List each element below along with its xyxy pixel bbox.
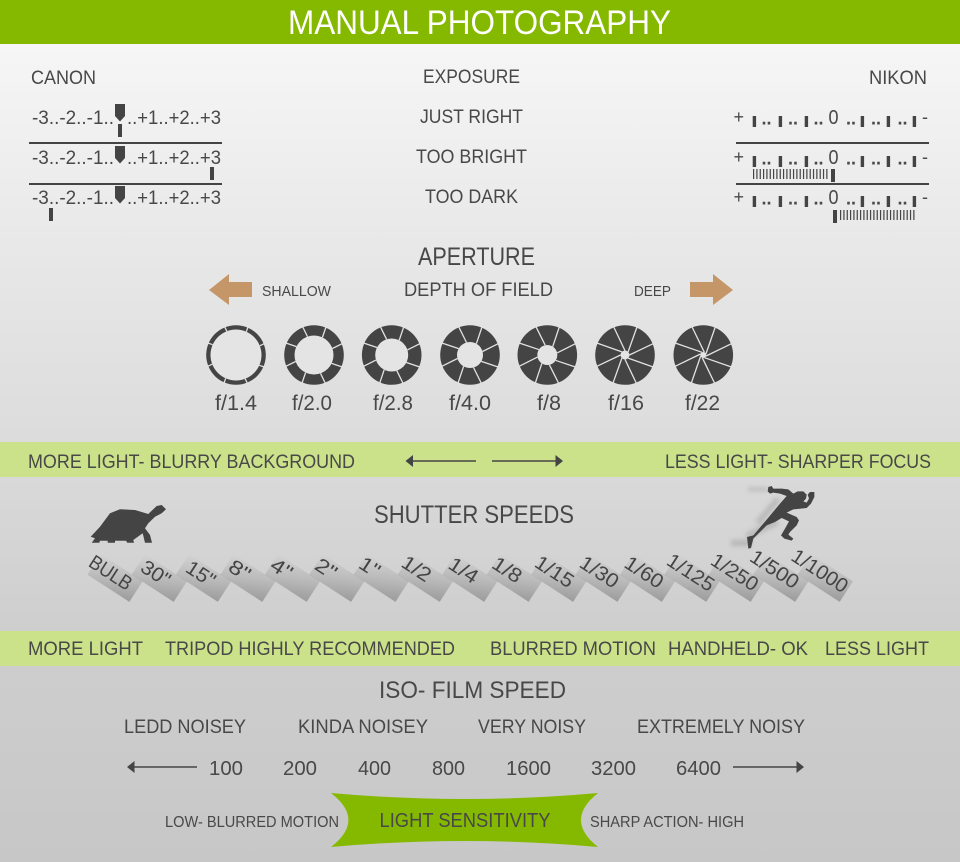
nikon meter: too bright: .. [788, 148, 798, 168]
icon: tortoise [91, 505, 166, 543]
label: deep: DEEP [634, 283, 671, 300]
canon meter: just right [32, 104, 221, 137]
shutter tag: 4 seconds [265, 554, 320, 602]
icon: aperture f/22 [674, 325, 733, 385]
shutter tag: 30 seconds: 30" [136, 556, 174, 592]
heading: aperture: APERTURE [418, 243, 535, 271]
icon: aperture f/1.4 [206, 325, 266, 385]
noise labels: LEDD NOISEY [124, 717, 246, 738]
f-stop labels: f/8 [537, 392, 561, 415]
text: more light: MORE LIGHT [28, 639, 143, 660]
label: low blurred motion: LOW- BLURRED MOTION [165, 814, 339, 831]
f-stop labels [215, 392, 720, 415]
noise labels: VERY NOISY [478, 717, 586, 738]
arrow: shallow [209, 274, 252, 305]
shutter tag: 1/125: 1/125 [663, 550, 718, 596]
f-stop labels: f/4.0 [449, 392, 491, 415]
ribbon: light sensitivity: LIGHT SENSITIVITY [380, 810, 550, 832]
arrow: right [492, 455, 563, 467]
text: less light: LESS LIGHT- SHARPER FOCUS [665, 452, 931, 473]
iso values: 1600 [506, 758, 551, 780]
nikon meter: too bright: .. [871, 148, 881, 168]
nikon meter: just right: .. [897, 108, 908, 128]
shutter tag: 15 seconds [176, 554, 231, 602]
nikon meter: just right: .. [871, 108, 881, 128]
nikon meter: too bright: + [733, 147, 744, 167]
arrow: deep [690, 274, 733, 305]
nikon meter: just right: + [733, 107, 744, 127]
iso values: 100 [209, 758, 243, 780]
f-stop labels: f/2.8 [373, 392, 413, 415]
title banner: MANUAL PHOTOGRAPHY [288, 4, 671, 42]
icon: aperture f/8 [518, 325, 577, 385]
shutter tag: 8 seconds: 8" [224, 556, 255, 586]
heading: canon: CANON [31, 68, 96, 89]
shutter tag: 1/4 [442, 553, 498, 602]
heading: exposure: EXPOSURE [423, 67, 520, 88]
text: less light: LESS LIGHT [825, 639, 929, 660]
noise labels: KINDA NOISEY [298, 717, 428, 738]
icon: aperture f/4.0 [440, 325, 500, 385]
shutter tag: 1/250: 1/250 [707, 549, 762, 596]
nikon meter: too bright: 0 [828, 147, 838, 169]
label: depth of field: DEPTH OF FIELD [404, 280, 553, 301]
nikon meter: too dark: 0 [828, 187, 838, 209]
canon meter: too bright [32, 146, 221, 180]
nikon meter: too dark: .. [761, 188, 772, 208]
shutter tag: 1/2 [395, 552, 454, 602]
nikon meter: too bright: .. [897, 148, 908, 168]
f-stop labels: f/1.4 [215, 392, 257, 415]
label: too dark: TOO DARK [425, 187, 518, 208]
shutter tag: 2 seconds [309, 554, 364, 602]
label: just right: JUST RIGHT [420, 107, 523, 128]
nikon meter: too bright [733, 147, 928, 182]
f-stop labels: f/16 [608, 392, 644, 415]
panel: iso [124, 677, 805, 847]
noise labels [124, 717, 805, 738]
nikon meter: too bright: - [922, 147, 928, 167]
nikon meter: too dark: .. [813, 188, 824, 208]
band: light and focus [0, 442, 960, 477]
shutter tag: 4 seconds: 4" [266, 554, 297, 585]
shutter tag: 1 second: 1" [355, 553, 384, 583]
canon meter: too dark: ..+1..+2..+3 [127, 188, 221, 209]
nikon meter: too bright: .. [761, 148, 772, 168]
icon: aperture f/2.8 [362, 325, 422, 385]
shutter tag: 1 second [353, 553, 409, 602]
nikon meter: too dark: .. [846, 188, 856, 208]
nikon meter: too bright: .. [813, 148, 824, 168]
panel: shutter speeds [83, 486, 854, 602]
icon: aperture f/16 [595, 325, 655, 385]
shutter tag: 1/60: 1/60 [620, 552, 667, 593]
canon meter: too dark [32, 186, 221, 221]
label: shallow: SHALLOW [262, 283, 332, 300]
nikon meter: too dark: .. [897, 188, 908, 208]
ribbon: light sensitivity [331, 793, 598, 847]
heading: iso film speed: ISO- FILM SPEED [379, 677, 566, 704]
f-stop labels: f/22 [685, 392, 720, 415]
f-stop labels: f/2.0 [292, 392, 332, 415]
iso values [209, 758, 721, 780]
text: more light: MORE LIGHT- BLURRY BACKGROUND [28, 452, 355, 473]
text: handheld: HANDHELD- OK [668, 639, 808, 660]
nikon meter: just right: .. [846, 108, 856, 128]
text: blurred motion: BLURRED MOTION [490, 639, 656, 660]
shutter tag: 8 seconds [220, 554, 276, 602]
canon meter: just right: ..+1..+2..+3 [127, 108, 221, 129]
panel: exposure [29, 67, 929, 223]
nikon meter: just right [733, 107, 928, 129]
canon meter: too dark: -3..-2..-1.. [32, 188, 114, 209]
label: too bright: TOO BRIGHT [416, 147, 527, 168]
nikon meter: just right: 0 [828, 107, 838, 129]
shutter tag: 1/30: 1/30 [575, 552, 623, 593]
nikon meter: too bright: .. [846, 148, 856, 168]
noise labels: EXTREMELY NOISY [637, 717, 805, 738]
shutter tag: 1/8 [486, 553, 543, 602]
nikon meter: just right: - [922, 107, 928, 127]
shutter tag: 1/30 [573, 552, 631, 602]
shutter tag: 1/1000: 1/1000 [787, 545, 852, 598]
heading: nikon: NIKON [869, 68, 927, 89]
heading: shutter speeds: SHUTTER SPEEDS [374, 501, 574, 529]
shutter tag: 1/500 [743, 546, 810, 602]
canon meter: just right: -3..-2..-1.. [32, 108, 114, 129]
nikon meter: too dark: .. [871, 188, 881, 208]
shutter tag: 1/500: 1/500 [746, 546, 803, 594]
nikon meter: too dark: + [733, 187, 744, 207]
panel: aperture [206, 243, 733, 415]
arrow: left [406, 455, 476, 467]
shutter tag: 1/15: 1/15 [531, 552, 578, 593]
arrow: iso right [733, 761, 804, 773]
nikon meter: just right: .. [761, 108, 772, 128]
title banner [0, 0, 960, 44]
shutter tag: 1/60 [618, 552, 676, 602]
canon meter: too bright: -3..-2..-1.. [32, 148, 114, 169]
shutter tag: 2 seconds: 2" [310, 554, 341, 585]
iso values: 200 [283, 758, 317, 780]
shutter tag: 1/2: 1/2 [397, 552, 435, 587]
iso values: 3200 [591, 758, 636, 780]
nikon meter: too dark [733, 187, 928, 223]
band: shutter guidance [0, 631, 960, 666]
shutter tag: 15 seconds: 15" [181, 557, 219, 592]
iso values: 6400 [676, 758, 721, 780]
iso values: 800 [432, 758, 465, 780]
nikon meter: too dark: .. [788, 188, 798, 208]
nikon meter: too dark: - [922, 187, 928, 207]
iso values: 400 [358, 758, 391, 780]
arrow: iso left [127, 761, 197, 773]
shutter tag: 1/15 [529, 552, 587, 602]
icon: sprinter [731, 486, 814, 549]
shutter tag: 30 seconds [132, 554, 187, 602]
label: sharp action high: SHARP ACTION- HIGH [590, 814, 744, 831]
canon meter: too bright: ..+1..+2..+3 [127, 148, 221, 169]
shutter tag: 1/4: 1/4 [444, 553, 482, 589]
shutter tag: 1/8: 1/8 [488, 553, 526, 588]
nikon meter: just right: .. [788, 108, 798, 128]
nikon meter: just right: .. [813, 108, 824, 128]
text: tripod: TRIPOD HIGHLY RECOMMENDED [165, 639, 455, 660]
shutter tag: BULB: BULB [85, 551, 136, 595]
icon: aperture f/2.0 [284, 325, 344, 385]
